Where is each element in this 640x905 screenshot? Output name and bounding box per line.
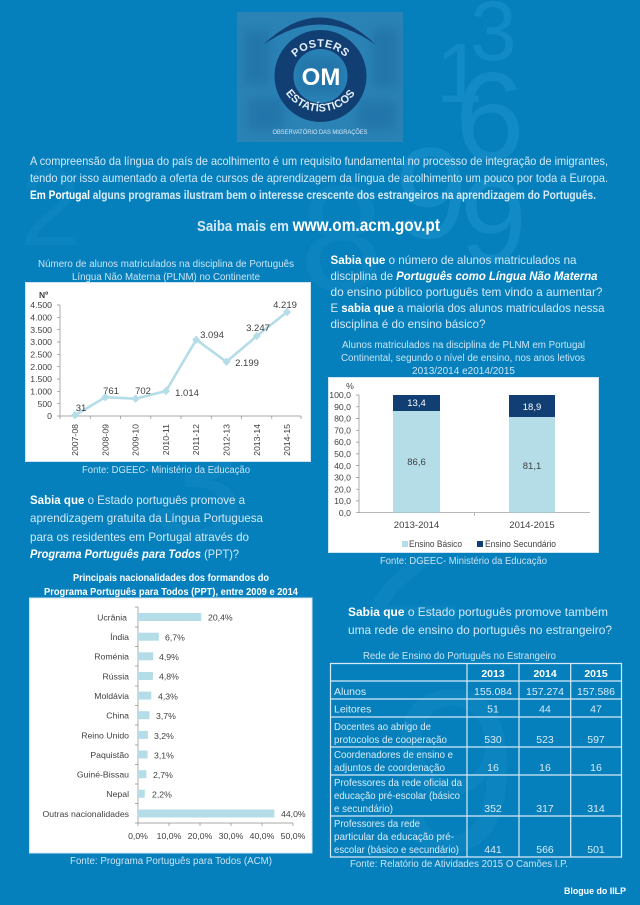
horizontal bar chart panel: Nepal — [106, 789, 129, 799]
line chart panel: 2010-11 — [161, 424, 171, 455]
table: rede de ensino: 157.274 — [526, 686, 564, 698]
stacked bar chart panel: Ensino Secundário — [485, 539, 556, 550]
line chart panel: 3.500 — [30, 325, 52, 335]
stacked bar chart panel: 0,0 — [339, 508, 351, 518]
horizontal bar chart panel: 0,0% — [128, 831, 148, 841]
line chart panel: 761 — [103, 386, 119, 397]
horizontal bar chart panel: 3,7% — [156, 711, 176, 721]
heading: sabia que PLNM: E sabia que a maioria dos alunos matriculados nessa — [330, 301, 605, 315]
heading: sabia que PPT: Programa Português para Todos (PPT)? — [30, 547, 239, 561]
line chart title: Língua Não Materna (PLNM) no Continente — [72, 272, 260, 283]
stacked bar chart panel: 2014-2015 — [509, 520, 555, 531]
line chart panel: 31 — [76, 403, 86, 414]
table: rede de ensino: 317 — [536, 803, 554, 815]
horizontal bar chart panel: Roménia — [94, 652, 129, 662]
table: rede de ensino: educação pré-escolar (básico — [334, 790, 460, 802]
line chart panel: 4.500 — [30, 300, 52, 310]
horizontal bar chart panel: 6,7% — [165, 632, 185, 642]
table: rede de ensino: e secundário) — [334, 803, 393, 815]
line chart panel: 1.000 — [30, 386, 52, 396]
horizontal bar chart panel: Ucrânia — [97, 612, 127, 622]
heading: sabia que PPT: aprendizagem gratuita da Língua Portuguesa — [30, 511, 263, 525]
horizontal bar chart panel: 40,0% — [250, 831, 275, 841]
table: rede de ensino: Professores da rede — [334, 818, 420, 830]
line chart panel: 2009-10 — [131, 424, 141, 456]
table: rede de ensino: 51 — [487, 704, 499, 716]
horizontal bar chart panel: Outras nacionalidades — [43, 809, 130, 819]
horizontal bar chart panel: Rússia — [102, 672, 129, 682]
horizontal bar chart panel — [30, 598, 312, 853]
table: rede de ensino: 523 — [536, 734, 554, 746]
stacked bar chart title: 2013/2014 e2014/2015 — [412, 366, 515, 377]
logo: Posters Estatísticos OM — [237, 12, 403, 142]
stacked bar chart panel: Ensino Básico — [409, 539, 462, 550]
stacked bar chart panel: 100,0 — [329, 390, 351, 400]
table: rede de ensino: escolar (básico e secundário) — [334, 844, 459, 856]
line chart panel: 500 — [38, 399, 52, 409]
stacked bar chart panel: 81,1 — [523, 461, 541, 472]
horizontal bar chart panel: Guiné-Bissau — [77, 770, 129, 780]
stacked bar chart panel: 50,0 — [334, 449, 351, 459]
line chart panel: 4.000 — [30, 312, 52, 322]
line chart panel: 2.199 — [235, 358, 259, 369]
background numerals: 2 — [360, 449, 466, 661]
table: rede de ensino: 597 — [587, 734, 605, 746]
horizontal bar chart panel: Reino Unido — [81, 730, 129, 740]
table: rede de ensino: 44 — [539, 704, 551, 716]
stacked bar chart panel: 18,9 — [523, 402, 541, 413]
line chart title: Número de alunos matriculados na disciplina de Português — [38, 259, 294, 270]
line chart panel: 2011-12 — [191, 424, 201, 455]
stacked bar chart panel: 90,0 — [334, 402, 351, 412]
website call to action: Saiba mais em www.om.acm.gov.pt — [197, 215, 440, 235]
stacked bar chart panel: % — [346, 381, 354, 391]
table: rede de ensino: 155.084 — [474, 686, 512, 698]
table: rede de ensino: particular da educação pré- — [334, 831, 454, 843]
horizontal bar chart panel: Índia — [110, 632, 129, 642]
table: rede de ensino: 16 — [539, 762, 551, 774]
table: rede de ensino: 314 — [587, 803, 605, 815]
horizontal bar chart panel: 4,3% — [158, 692, 178, 702]
logo: Posters Estatísticos OM: POSTERS — [290, 39, 349, 57]
background numerals — [20, 0, 527, 899]
horizontal bar chart panel: 10,0% — [157, 831, 182, 841]
horizontal bar chart panel: 2,2% — [152, 790, 172, 800]
horizontal bar chart panel: 4,8% — [159, 672, 179, 682]
horizontal bar chart panel: 3,2% — [154, 731, 174, 741]
heading: sabia que PPT: para os residentes em Portugal através do — [30, 530, 249, 544]
horizontal bar chart panel: China — [106, 710, 129, 720]
table: rede de ensino: Alunos — [334, 686, 366, 698]
table: rede de ensino: 2013 — [481, 668, 505, 680]
table: rede de ensino: 566 — [536, 844, 554, 856]
stacked bar chart source: Fonte: DGEEC- Ministério da Educação — [380, 556, 547, 567]
line chart panel — [26, 282, 310, 462]
background numerals: 0 — [170, 647, 265, 837]
table: rede de ensino: adjuntos de coordenação — [334, 762, 445, 774]
line chart panel: 4.219 — [273, 300, 297, 311]
horizontal bar chart panel: 44,0% — [281, 809, 306, 819]
horizontal bar chart panel: Moldávia — [94, 691, 129, 701]
line chart panel: 3.094 — [200, 330, 224, 341]
stacked bar chart panel: 80,0 — [334, 414, 351, 424]
background numerals: 9 — [460, 154, 527, 288]
stacked bar chart panel: 70,0 — [334, 426, 351, 436]
table: rede de ensino: Coordenadores de ensino e — [334, 749, 453, 761]
background numerals: 8 — [300, 154, 383, 322]
line chart panel: 2012-13 — [222, 424, 232, 456]
heading: sabia que PLNM — [330, 253, 605, 331]
table: rede de ensino: 47 — [590, 704, 602, 716]
horizontal bar chart title: Principais nacionalidades dos formandos do — [73, 573, 269, 584]
line chart panel: 0 — [47, 411, 52, 421]
heading: sabia que PPT: Sabia que o Estado português promove a — [30, 493, 245, 507]
table: rede de ensino: protocolos de cooperação — [334, 734, 447, 746]
stacked bar chart panel: 30,0 — [334, 472, 351, 482]
background numerals: 2 — [20, 146, 81, 269]
heading: sabia que rede de ensino: uma rede de ensino do português no estrangeiro? — [348, 623, 612, 637]
line chart title — [38, 259, 294, 283]
horizontal bar chart panel: 2,7% — [153, 770, 173, 780]
stacked bar chart panel: 40,0 — [334, 461, 351, 471]
table source: Fonte: Relatório de Atividades 2015 O Camões I.P. — [350, 859, 568, 870]
line chart panel: 2008-09 — [100, 424, 110, 456]
heading: sabia que PLNM: do ensino público português tem vindo a aumentar? — [330, 285, 603, 299]
stacked bar chart panel: 13,4 — [407, 398, 426, 409]
table: rede de ensino: 16 — [590, 762, 602, 774]
stacked bar chart title — [341, 340, 585, 377]
background numerals: 1 — [436, 26, 483, 120]
horizontal bar chart panel: 20,4% — [208, 612, 233, 622]
horizontal bar chart panel: Paquistão — [90, 750, 129, 760]
heading: sabia que PPT — [30, 493, 263, 561]
line chart panel: 702 — [135, 386, 151, 397]
table: rede de ensino: 16 — [487, 762, 499, 774]
table: rede de ensino: 352 — [484, 803, 502, 815]
table title: Rede de Ensino do Português no Estrangeiro — [363, 651, 556, 662]
heading: sabia que rede de ensino: Sabia que o Estado português promove também — [348, 605, 608, 619]
line chart panel: 2.500 — [30, 350, 52, 360]
horizontal bar chart title — [44, 573, 298, 598]
heading: sabia que rede de ensino — [348, 605, 612, 637]
background numerals: 9 — [390, 642, 518, 899]
line chart panel: 2013-14 — [252, 424, 262, 456]
horizontal bar chart panel: 4,9% — [159, 652, 179, 662]
stacked bar chart panel: 10,0 — [334, 496, 351, 506]
background numerals: 6 — [455, 48, 525, 187]
heading: sabia que PLNM: Sabia que o número de alunos matriculados na — [330, 253, 577, 267]
horizontal bar chart panel: 20,0% — [188, 831, 213, 841]
stacked bar chart panel: 60,0 — [334, 437, 351, 447]
line chart panel: 1.014 — [175, 388, 199, 399]
stacked bar chart panel: 86,6 — [407, 457, 426, 468]
stacked bar chart title: Alunos matriculados na disciplina de PLNM em Portugal — [342, 340, 585, 351]
horizontal bar chart source: Fonte: Programa Português para Todos (ACM) — [70, 856, 272, 867]
stacked bar chart title: Continental, segundo o nível de ensino, nos anos letivos — [341, 353, 585, 364]
table: rede de ensino: 501 — [587, 844, 605, 856]
heading: sabia que PLNM: disciplina é do ensino básico? — [330, 317, 486, 331]
table: rede de ensino: 441 — [484, 844, 502, 856]
line chart panel: Nº — [39, 290, 48, 300]
horizontal bar chart title: Programa Português para Todos (PPT), entre 2009 e 2014 — [44, 587, 298, 598]
logo: Posters Estatísticos OM: OBSERVATÓRIO DAS MIGRAÇÕES — [272, 129, 368, 136]
footer credit: Blogue do IILP — [564, 886, 627, 897]
table: rede de ensino: 2014 — [533, 668, 557, 680]
background numerals: 3 — [150, 387, 245, 577]
horizontal bar chart panel: 3,1% — [154, 750, 174, 760]
table: rede de ensino: Docentes ao abrigo de — [334, 721, 431, 733]
line chart panel: 2014-15 — [282, 424, 292, 456]
stacked bar chart panel: 2013-2014 — [394, 520, 439, 531]
table: rede de ensino: Leitores — [334, 704, 371, 716]
stacked bar chart panel: 20,0 — [334, 484, 351, 494]
table: rede de ensino: Professores da rede oficial da — [334, 777, 462, 789]
logo: Posters Estatísticos OM: ESTATÍSTICOS — [286, 88, 354, 112]
line chart panel: 3.247 — [246, 323, 270, 334]
intro text — [30, 154, 608, 202]
line chart source: Fonte: DGEEC- Ministério da Educação — [82, 465, 250, 476]
horizontal bar chart panel: 50,0% — [281, 831, 306, 841]
background numerals: 9 — [395, 120, 467, 266]
line chart panel: 2007-08 — [70, 424, 80, 456]
table: rede de ensino: 2015 — [584, 668, 608, 680]
line chart panel: 2.000 — [30, 362, 52, 372]
table: rede de ensino: 157.586 — [577, 686, 615, 698]
stacked bar chart panel — [328, 378, 598, 552]
heading: sabia que PLNM: disciplina de Português como Língua Não Materna — [330, 269, 598, 283]
table: rede de ensino — [330, 663, 622, 858]
horizontal bar chart panel: 30,0% — [219, 831, 244, 841]
line chart panel: 3.000 — [30, 337, 52, 347]
table: rede de ensino: 530 — [484, 734, 502, 746]
logo: Posters Estatísticos OM: OM — [302, 64, 340, 91]
line chart panel: 1.500 — [30, 374, 52, 384]
